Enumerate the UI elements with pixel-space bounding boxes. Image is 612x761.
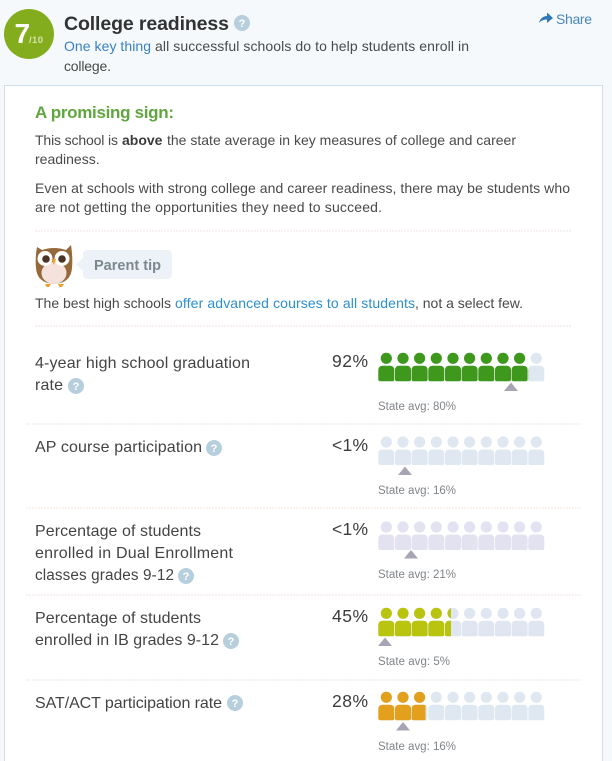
state average: State avg: 80% [378,401,456,413]
row: IB enrollment [35,606,544,668]
label [35,355,250,394]
pictogram [378,692,544,720]
score badge: /10 [29,35,43,46]
score badge [4,9,54,59]
pictogram [378,353,544,381]
label: ? [228,636,235,648]
text block: parent tip: The best high schools [35,295,171,311]
state average: State avg: 16% [378,741,456,753]
label: ? [73,381,80,393]
value: <1% [332,435,368,455]
row: graduation rate [35,351,544,413]
label: Percentage of students [35,610,201,627]
label [35,610,239,649]
state average: State avg: 5% [378,656,450,668]
text block: summary: This school is [35,132,118,148]
row: dual enrollment [35,519,544,584]
label: enrolled in Dual Enrollment [35,545,234,562]
state marker [404,550,418,558]
state average: State avg: 16% [378,485,456,497]
text block: summary: the state average in key measures of college and career [167,132,516,148]
label: classes grades 9-12 [35,567,174,584]
icon: title help [234,15,250,31]
label: ? [232,698,239,710]
row: AP course participation [35,435,544,497]
subtitle: college. [64,58,111,74]
text block: summary: above [122,132,163,148]
subtitle: all successful schools do to help students enroll in [155,38,469,54]
value: 45% [332,606,368,626]
share link [539,11,592,27]
label: AP course participation [35,439,202,456]
text block: summary: are not getting the opportunities they need to succeed. [35,199,382,215]
pictogram [378,608,544,636]
text block: parent tip: offer advanced courses to all students [175,295,415,311]
value: 92% [332,351,368,371]
label: ? [211,443,218,455]
value: <1% [332,519,368,539]
icon: owl [36,245,72,287]
subtitle [64,38,469,74]
value: 28% [332,691,368,711]
text block: parent tip: , not a select few. [415,295,523,311]
label: enrolled in IB grades 9-12 [35,632,219,649]
state marker [396,722,410,730]
row: SAT/ACT participation [35,691,544,753]
share link: Share [556,11,592,27]
text block: summary: Even at schools with strong college and career readiness, there may be students who [35,180,570,196]
icon: title help: ? [239,18,246,30]
score badge: 7 [14,18,30,49]
state marker [398,466,412,475]
heading: a promising sign: A promising sign: [35,103,174,122]
state average: State avg: 21% [378,569,456,581]
label: rate [35,377,63,394]
text block: summary [35,132,570,215]
state marker [504,382,518,391]
pictogram [378,436,544,465]
label [35,523,234,584]
label: 4-year high school graduation [35,355,250,372]
callout: parent tip: Parent tip [94,258,161,274]
callout: parent tip [76,250,172,279]
state marker [378,638,392,646]
subtitle: One key thing [64,38,151,54]
label: SAT/ACT participation rate [35,695,222,712]
label: Percentage of students [35,523,201,540]
text block: summary: readiness. [35,151,100,167]
text block: parent tip [35,295,523,311]
pictogram [378,521,544,550]
label: ? [183,571,190,583]
title: College readiness [64,13,229,35]
